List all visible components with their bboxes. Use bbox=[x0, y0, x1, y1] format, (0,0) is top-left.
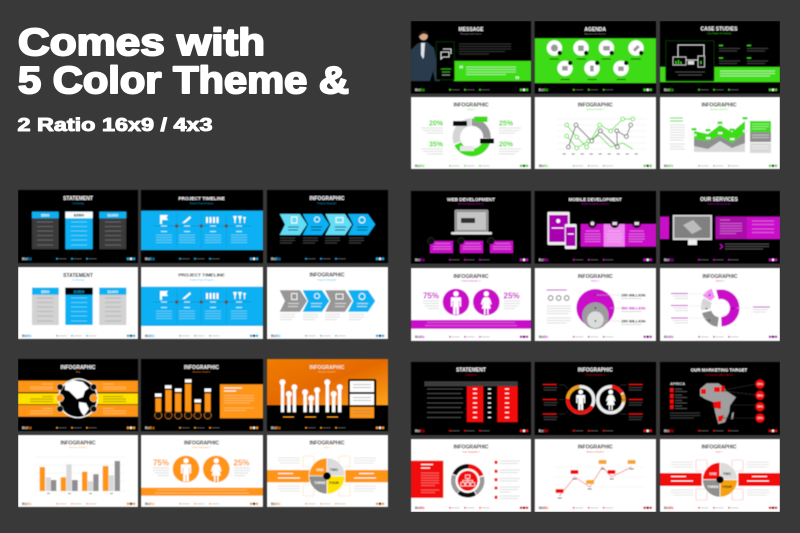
slide: area chart (green): Business Growth 3 bbox=[710, 108, 729, 111]
slide: globe infographic (orange): Map bbox=[76, 372, 81, 374]
footer bbox=[56, 426, 135, 429]
footer bbox=[449, 88, 528, 91]
heading: INFOGRAPHIC bbox=[310, 272, 345, 278]
slide: segmented donut (magenta): BizBiz bbox=[664, 335, 674, 339]
tablet bbox=[547, 212, 570, 245]
slide: chevron process light (blue): Progress Infographic bbox=[317, 278, 337, 282]
slide: gender infographic (orange) bbox=[141, 435, 263, 507]
message text bbox=[459, 44, 511, 54]
four part circle bbox=[703, 462, 737, 497]
footer bbox=[573, 164, 652, 167]
slide: statement pricing light (blue) bbox=[18, 267, 138, 339]
slide: our services (magenta): Some of Services we do bbox=[708, 202, 731, 206]
slide: marketing target map (red): BizBiz bbox=[664, 429, 674, 433]
percent circles: 35% bbox=[757, 393, 763, 397]
slide: globe infographic (orange) bbox=[18, 359, 138, 431]
green band bbox=[454, 61, 531, 81]
heading: INFOGRAPHIC bbox=[578, 274, 613, 280]
slide: cycle infographic (red): Team Infographic 1 bbox=[462, 450, 481, 454]
footer bbox=[305, 502, 384, 505]
slide: pillar chart on photo (orange): BizBiz bbox=[271, 426, 281, 430]
side labels bbox=[543, 384, 643, 420]
slide: bar chart dark (orange) bbox=[141, 359, 263, 431]
figures bbox=[576, 390, 615, 410]
slide: four part circle (red): Team 1 bbox=[716, 452, 723, 454]
percentages bbox=[423, 292, 520, 300]
slide: chevron process light (blue): BizBiz bbox=[271, 334, 281, 338]
woman circle bbox=[203, 456, 230, 482]
heading: INFOGRAPHIC bbox=[184, 365, 219, 371]
globe bbox=[58, 378, 98, 418]
slide: project timeline dark (blue): BizBiz bbox=[145, 257, 155, 261]
slide: web development (magenta) bbox=[411, 191, 531, 264]
slide: segmented donut (magenta): Market 2 bbox=[716, 280, 725, 282]
heading: AGENDA bbox=[584, 27, 606, 33]
growth chart bbox=[555, 460, 645, 498]
value labels bbox=[621, 292, 646, 324]
slide: donut infographic (green): BizBiz bbox=[415, 164, 425, 168]
slide: chevron process dark (blue) bbox=[267, 190, 388, 263]
quadrant labels: ONE bbox=[316, 468, 324, 472]
heading: INFOGRAPHIC bbox=[454, 444, 489, 450]
side text bbox=[671, 462, 769, 495]
portrait bbox=[411, 31, 440, 81]
slide: project timeline light (blue): Timeline Project Progress bbox=[190, 278, 213, 282]
slide: globe infographic (orange): BizBiz bbox=[22, 426, 32, 430]
slide: project timeline light (blue): BizBiz bbox=[145, 334, 155, 338]
heading: OUR MARKETING TARGET bbox=[691, 368, 748, 372]
stat blocks bbox=[719, 46, 768, 64]
percent circles: 15% bbox=[757, 416, 763, 420]
title: Comes with 5 Color Theme: 2 Ratio 16x9 / 4x3 bbox=[18, 115, 212, 135]
heading: INFOGRAPHIC bbox=[702, 444, 737, 450]
percent circles: 15% bbox=[757, 405, 763, 409]
percentages: 25% bbox=[234, 458, 250, 468]
icon circles bbox=[428, 238, 494, 244]
heading: INFOGRAPHIC bbox=[578, 102, 613, 108]
quadrant labels: FOUR bbox=[722, 485, 732, 489]
icon circles bbox=[588, 219, 641, 228]
footer bbox=[305, 258, 384, 260]
left block bbox=[660, 217, 669, 239]
band bbox=[411, 320, 531, 329]
slide: line chart (green): Business Growth 2 bbox=[586, 108, 605, 111]
footer bbox=[179, 502, 258, 505]
side text bbox=[278, 458, 376, 491]
percentages: 25% bbox=[499, 120, 514, 128]
legend boxes bbox=[750, 121, 771, 153]
quadrant labels: FOUR bbox=[329, 481, 339, 485]
heading: MESSAGE bbox=[458, 27, 484, 33]
slide: segmented donut (magenta) bbox=[660, 268, 780, 341]
footer bbox=[449, 430, 528, 432]
slide: bar chart light (orange): Business Growth 3 bbox=[69, 446, 88, 449]
slide: statement table (red): BizBiz bbox=[415, 429, 425, 433]
slide: price tags chart (red) bbox=[535, 439, 656, 512]
quadrant labels bbox=[314, 468, 339, 485]
footer bbox=[179, 426, 258, 429]
footer bbox=[698, 506, 777, 509]
slide: project timeline dark (blue) bbox=[141, 190, 263, 263]
icon outlines bbox=[696, 460, 743, 500]
heading: PROJECT TIMELINE bbox=[178, 272, 225, 278]
bar icons bbox=[155, 412, 211, 419]
center icon bbox=[458, 471, 478, 491]
footer bbox=[449, 164, 528, 167]
red text box bbox=[411, 461, 443, 498]
pricing column 3: $1400 bbox=[108, 290, 118, 294]
heading: INFOGRAPHIC bbox=[184, 440, 219, 446]
timeline band bbox=[141, 211, 263, 250]
slide: mobile development (magenta): BizBiz bbox=[539, 258, 549, 262]
heading: INFOGRAPHIC bbox=[310, 196, 345, 202]
heading: INFOGRAPHIC bbox=[60, 365, 96, 371]
slide: infinity rings (red) bbox=[535, 362, 656, 435]
heading: INFOGRAPHIC bbox=[310, 440, 345, 446]
slide: donut infographic (green): Donut 1 bbox=[467, 108, 475, 111]
heading: INFOGRAPHIC bbox=[454, 102, 489, 108]
slide: message (green) bbox=[411, 21, 531, 94]
slide: message (green): ” bbox=[515, 75, 520, 85]
slide: infinity rings (red): BizBiz bbox=[539, 429, 549, 433]
slide: agenda (green): BizBiz bbox=[539, 88, 549, 92]
white pillars bbox=[280, 379, 343, 412]
footer bbox=[179, 258, 258, 260]
cycle ring bbox=[447, 460, 488, 501]
title: Comes with 5 Color Theme: Comes with bbox=[18, 22, 265, 64]
side panel bbox=[348, 379, 376, 420]
quadrant labels: TWO bbox=[330, 468, 338, 472]
globe icon nodes bbox=[56, 384, 97, 412]
footer bbox=[698, 88, 777, 91]
chevron note bbox=[720, 244, 722, 249]
footer bbox=[698, 164, 777, 167]
pricing column 1: $500 bbox=[41, 214, 50, 218]
footer bbox=[305, 334, 384, 337]
heading: INFOGRAPHIC bbox=[578, 368, 613, 374]
heading: INFOGRAPHIC bbox=[454, 274, 489, 280]
bullet list bbox=[494, 461, 520, 499]
percentages: 20% bbox=[429, 120, 444, 128]
footer bbox=[573, 430, 652, 432]
slide: price tags chart (red): Business Growth 4 bbox=[586, 450, 605, 454]
slide: nested circles (magenta): Market 1 bbox=[591, 280, 600, 282]
percentages: 75% bbox=[153, 458, 169, 468]
heading: PROJECT TIMELINE bbox=[178, 196, 225, 202]
quadrant labels: THREE bbox=[707, 485, 719, 489]
slide: message (green): BizBiz bbox=[415, 88, 425, 92]
percent circles bbox=[756, 380, 764, 422]
side bands bbox=[267, 470, 388, 482]
heading: INFOGRAPHIC bbox=[310, 365, 345, 371]
timeline band bbox=[141, 287, 263, 326]
slide: mobile development (magenta): Mobile Development Services bbox=[581, 203, 609, 206]
slide: message (green): Message from Director bbox=[460, 32, 482, 36]
footer bbox=[573, 88, 652, 91]
slide: pillar chart on photo (orange) bbox=[267, 359, 388, 431]
footer bbox=[698, 430, 777, 432]
footer bbox=[56, 334, 135, 337]
footer bbox=[56, 502, 135, 505]
value labels: 250 MILLION bbox=[621, 318, 646, 324]
slide: line chart (green) bbox=[535, 97, 656, 169]
value labels: 500 MILLION bbox=[621, 306, 646, 310]
slide: area chart (green): BizBiz bbox=[664, 164, 674, 168]
man circle bbox=[443, 289, 469, 315]
slide: nested circles (magenta): BizBiz bbox=[539, 335, 549, 339]
pillar captions bbox=[283, 416, 338, 418]
footer bbox=[449, 258, 528, 261]
slide: statement pricing light (blue): Our Strategy bbox=[72, 279, 85, 282]
chevron arrows bbox=[280, 214, 375, 235]
side text bbox=[670, 118, 683, 121]
green band bbox=[660, 67, 780, 82]
slide: gender infographic (magenta): BizBiz bbox=[415, 335, 425, 339]
area chart bbox=[692, 117, 748, 152]
slide: donut infographic (green) bbox=[411, 97, 531, 169]
connector lines bbox=[722, 384, 756, 418]
comparison table bbox=[424, 381, 518, 422]
photo background bbox=[267, 359, 388, 405]
pricing column 2: $3500 bbox=[74, 214, 84, 218]
slide: gender infographic (magenta) bbox=[411, 268, 531, 341]
pricing column 1: $500 bbox=[41, 290, 50, 294]
africa legend: AFRICA bbox=[670, 381, 685, 386]
heading: INFOGRAPHIC bbox=[578, 444, 613, 450]
heading: STATEMENT bbox=[456, 368, 486, 374]
slide: statement pricing dark (blue) bbox=[18, 190, 138, 263]
footer bbox=[449, 506, 528, 509]
footer bbox=[698, 336, 777, 338]
footer bbox=[573, 258, 652, 261]
slide: chevron process light (blue) bbox=[267, 267, 388, 339]
slide: four part circle (orange): Team 1 bbox=[324, 447, 331, 449]
quadrant labels: THREE bbox=[314, 481, 326, 485]
percent circles: 25% bbox=[757, 382, 763, 386]
line chart bbox=[557, 117, 647, 154]
woman circle bbox=[473, 289, 500, 315]
quadrant labels: ONE bbox=[709, 472, 717, 476]
green band with icon circles bbox=[535, 38, 656, 83]
nested circle chart bbox=[576, 289, 621, 329]
slide: agenda (green): Agenda of the Director bbox=[585, 32, 606, 36]
slide: statement table (red): Comparison bbox=[465, 374, 477, 376]
slide: our services (magenta): BizBiz bbox=[664, 258, 674, 262]
slide: pillar chart on photo (orange): Business Growth 2 bbox=[318, 370, 337, 374]
slide: area chart (green) bbox=[660, 97, 780, 169]
value labels: 250 MILLION bbox=[621, 292, 646, 298]
heading: INFOGRAPHIC bbox=[60, 440, 96, 446]
slide: bar chart dark (orange): Business Growth 1 bbox=[193, 370, 211, 374]
device card bbox=[666, 41, 714, 81]
heading: STATEMENT bbox=[63, 273, 93, 279]
slide: chevron process dark (blue): BizBiz bbox=[271, 257, 281, 261]
heading: OUR SERVICES bbox=[700, 197, 739, 203]
percentages: 20% bbox=[499, 142, 514, 148]
captions bbox=[280, 238, 364, 243]
slide: agenda (green) bbox=[535, 21, 656, 94]
heading: WEB DEVELOPMENT bbox=[447, 197, 495, 202]
monitor bbox=[673, 215, 712, 245]
footer bbox=[698, 258, 777, 261]
percentages bbox=[153, 458, 250, 468]
slide: four part circle (orange) bbox=[267, 435, 388, 507]
quadrant labels bbox=[707, 472, 732, 489]
service band bbox=[716, 217, 780, 239]
footer bbox=[179, 334, 258, 337]
slide: gender infographic (orange): People Infographic 1 bbox=[192, 446, 212, 449]
pricing column 2: $3500 bbox=[74, 290, 84, 294]
slide: four part circle (red) bbox=[660, 439, 780, 512]
slide: four part circle (orange): BizBiz bbox=[271, 502, 281, 506]
slide: price tags chart (red): BizBiz bbox=[539, 506, 549, 510]
quadrant labels: TWO bbox=[723, 472, 731, 476]
callout labels bbox=[671, 294, 770, 323]
laptop bbox=[451, 210, 492, 234]
segmented donut chart bbox=[699, 287, 738, 325]
heading: MOBILE DEVELOPMENT bbox=[569, 197, 622, 202]
slide: statement pricing dark (blue): Our Strategy bbox=[72, 202, 85, 205]
slide: marketing target map (red) bbox=[660, 362, 780, 435]
footer bbox=[573, 336, 652, 338]
percentages bbox=[429, 120, 514, 148]
slide: bar chart light (orange) bbox=[18, 435, 138, 507]
chevron arrows bbox=[280, 290, 375, 312]
slide: statement pricing light (blue): BizBiz bbox=[22, 334, 32, 338]
heading: INFOGRAPHIC bbox=[702, 102, 737, 108]
text box bbox=[220, 384, 263, 418]
heading: CASE STUDIES bbox=[701, 26, 738, 32]
left icons and text bbox=[547, 290, 571, 323]
captions bbox=[280, 314, 364, 320]
slide: gender infographic (magenta): People Infographic 1 bbox=[461, 280, 481, 282]
slide: case studies (green): BizBiz bbox=[664, 88, 674, 92]
slide: cycle infographic (red) bbox=[411, 439, 531, 512]
slide: cycle infographic (red): BizBiz bbox=[415, 506, 425, 510]
percentages: 25% bbox=[504, 292, 520, 300]
slide: bar chart light (orange): BizBiz bbox=[22, 502, 32, 506]
slide: nested circles (magenta) bbox=[535, 268, 656, 341]
africa map bbox=[700, 383, 736, 424]
bands bbox=[18, 381, 138, 417]
slide: bar chart dark (orange): BizBiz bbox=[145, 426, 155, 430]
footer bbox=[56, 258, 135, 260]
title: Comes with 5 Color Theme bbox=[18, 22, 349, 135]
callouts bbox=[453, 116, 494, 151]
percentages: 75% bbox=[423, 292, 439, 300]
slide: our services (magenta) bbox=[660, 191, 780, 264]
percentages: 35% bbox=[429, 142, 444, 148]
footer bbox=[305, 426, 384, 429]
right ring bbox=[593, 382, 628, 417]
feature band bbox=[581, 224, 656, 247]
slide: web development (magenta): Web Development Services bbox=[458, 203, 484, 206]
donut chart bbox=[452, 118, 491, 157]
title: Comes with 5 Color Theme: 5 Color Theme & bbox=[18, 60, 349, 102]
slide: infinity rings (red): People Infographic 1 bbox=[586, 374, 606, 376]
slide: marketing target map (red): Our Targeting in Africa Market bbox=[705, 374, 733, 376]
pricing column 3: $1400 bbox=[108, 214, 118, 218]
feature boxes bbox=[430, 241, 513, 253]
profile card bbox=[436, 42, 454, 80]
four part circle bbox=[309, 458, 345, 494]
bar labels bbox=[155, 379, 211, 403]
slide: chevron process dark (blue): Progress Infographic bbox=[317, 202, 337, 205]
quote marks: “ bbox=[459, 64, 464, 74]
slide: web development (magenta): BizBiz bbox=[415, 258, 425, 262]
footer bbox=[449, 336, 528, 338]
slide: four part circle (red): BizBiz bbox=[664, 506, 674, 510]
left ring bbox=[563, 382, 598, 417]
phone bbox=[565, 224, 577, 249]
footer bbox=[573, 506, 652, 509]
slide: project timeline light (blue) bbox=[141, 267, 263, 339]
slide: statement pricing dark (blue): BizBiz bbox=[22, 257, 32, 261]
slide: project timeline dark (blue): Timeline Project Progress bbox=[190, 202, 213, 205]
slide: mobile development (magenta) bbox=[535, 191, 656, 264]
slide: statement table (red) bbox=[411, 362, 531, 435]
band bbox=[141, 488, 263, 496]
heading: INFOGRAPHIC bbox=[702, 274, 738, 280]
slide: case studies (green) bbox=[660, 21, 780, 94]
slide: gender infographic (orange): BizBiz bbox=[145, 502, 155, 506]
heading: STATEMENT bbox=[63, 196, 93, 202]
slide: case studies (green): Case Studies of Company bbox=[707, 32, 732, 35]
icon outlines bbox=[303, 456, 350, 496]
man circle bbox=[173, 456, 199, 482]
side bands bbox=[660, 473, 780, 486]
slide: line chart (green): BizBiz bbox=[539, 164, 549, 168]
bars bbox=[155, 384, 211, 412]
bar chart bbox=[36, 457, 126, 494]
